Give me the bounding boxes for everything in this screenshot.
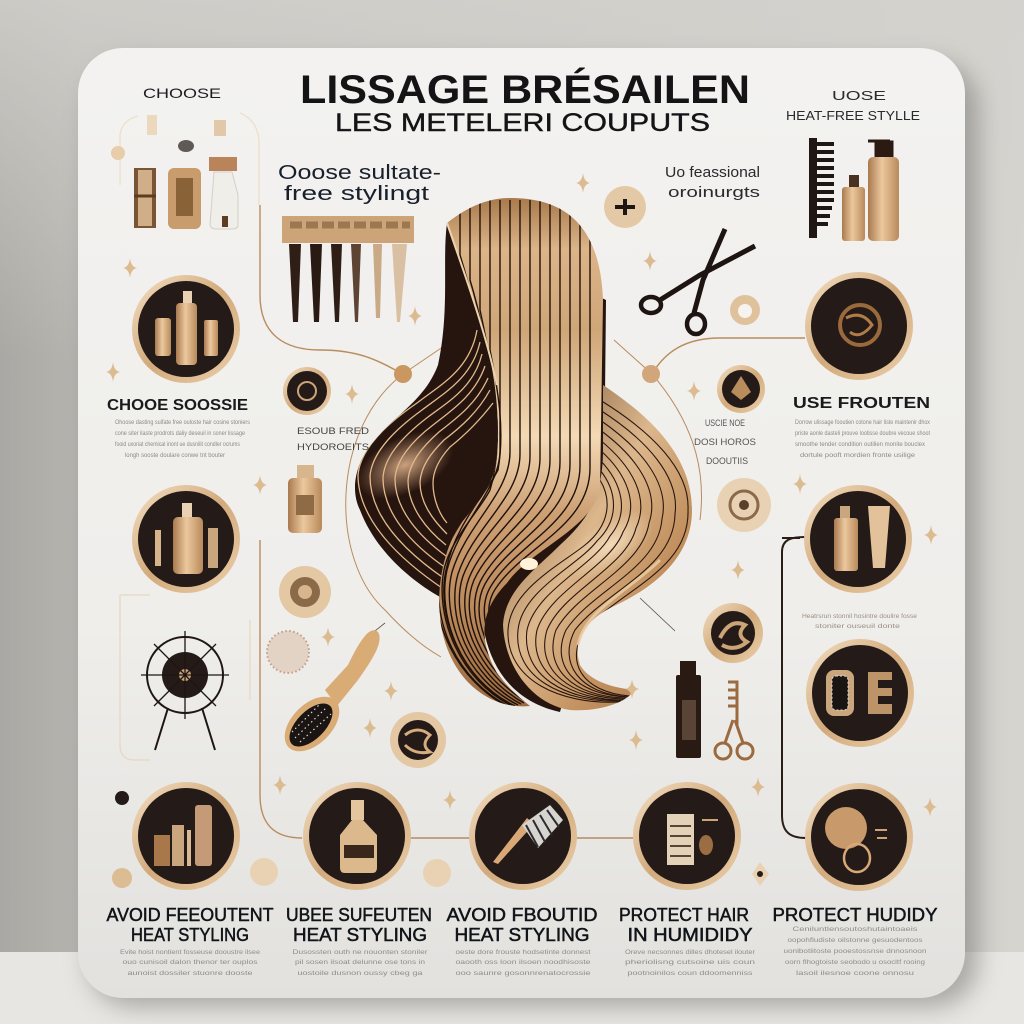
bottom paragraphs: oorn flhogtoiste seobodo u osocltf rooing xyxy=(785,960,925,966)
right paragraph: Dorrow ulissage fooutien cotone hair liste maintenir dhox xyxy=(795,420,930,426)
bottom headings: PROTECT HUDIDY xyxy=(772,905,938,925)
small ornaments bottom xyxy=(112,791,769,888)
back dark hair strand xyxy=(355,223,606,712)
title xyxy=(300,67,750,137)
hair brush xyxy=(275,630,380,761)
bottom paragraphs xyxy=(120,927,926,977)
plus badge xyxy=(604,186,646,228)
right paragraph: dortule pooft mordien fronte usilige xyxy=(800,453,916,459)
rose badge xyxy=(279,566,331,618)
wheel illustration xyxy=(120,595,250,760)
top right label xyxy=(786,88,920,123)
bottom paragraphs: Ceniluntlensoutoshutaintoaeis xyxy=(792,927,918,933)
comb and bottles top right xyxy=(809,138,899,241)
title: LES METELERI COUPUTS xyxy=(335,109,710,137)
small caption right: DOSI HOROS xyxy=(694,437,756,447)
right paragraph: priste aonle dasteli prouve lootisse doubre vecoue shoot xyxy=(795,431,930,437)
bottom paragraphs: pheriolisng cutsoine uis coun xyxy=(625,960,755,966)
bottom paragraphs: ouo cunisoil dalon thenor ter ouplos xyxy=(122,960,258,966)
bottom headings: HEAT STYLING xyxy=(293,925,427,945)
floor xyxy=(0,952,1024,1024)
product group top left xyxy=(111,113,259,229)
icon badge: brush and comb xyxy=(806,639,914,747)
subheading: professional: Uo feassional xyxy=(665,164,760,181)
bottom headings: HEAT STYLING xyxy=(454,925,590,945)
bottom headings: HEAT STYLING xyxy=(131,925,249,945)
bottom paragraphs: Evite hoist nontient fosseuse dooustre ilsee xyxy=(120,950,261,956)
top right label: UOSE xyxy=(832,88,886,103)
icon badge: three bottles xyxy=(132,275,240,383)
connector knots xyxy=(394,365,660,383)
small dark badge right bottom xyxy=(703,603,763,663)
sparkles xyxy=(106,173,938,817)
hair illustration xyxy=(346,198,692,712)
small caption right: DOOUTIIS xyxy=(706,456,748,466)
bottom headings: AVOID FBOUTID xyxy=(446,905,598,925)
bottom headings xyxy=(106,905,938,945)
bottom headings: AVOID FEEOUTENT xyxy=(106,905,274,925)
bottom headings: UBEE SUFEUTEN xyxy=(286,905,432,925)
small badge right top xyxy=(717,365,765,413)
subheading: sulfate-free styling: free stylingt xyxy=(284,183,430,205)
comb illustration xyxy=(282,216,414,322)
icon badge: tube and bottle xyxy=(804,485,912,593)
bottom paragraphs: lasoil ilesnoe coone onnosu xyxy=(796,971,914,977)
subheading: sulfate-free styling: Ooose sultate- xyxy=(278,162,441,184)
icon badge: cosmetics set xyxy=(132,782,240,890)
icon badge: brush right top xyxy=(805,272,913,380)
beige round badge right xyxy=(717,478,771,532)
left paragraph: cone siter ilaste prodrots daliy deseuil in soner lissage xyxy=(115,431,246,437)
small caption left xyxy=(297,426,370,452)
bottom paragraphs: aunoist dossiler stuonre dooste xyxy=(128,971,253,977)
small caption left: ESOUB FRED xyxy=(297,426,370,436)
icon badge: bottle and tools xyxy=(132,485,240,593)
heading: use: USE FROUTEN xyxy=(793,395,930,412)
connector lines xyxy=(260,205,806,838)
small gold ring xyxy=(730,295,760,325)
left paragraph: longh sooste doulare conwe tnt bouter xyxy=(125,453,225,459)
right light strand xyxy=(503,385,692,710)
subheading: professional xyxy=(665,164,760,201)
icon badge: shampoo bottle xyxy=(303,782,411,890)
bottom headings: IN HUMIDIDY xyxy=(628,925,752,945)
bottom paragraphs: pil sosen ilsoat delunne ose tons in xyxy=(295,960,425,966)
left paragraph xyxy=(115,420,250,459)
dotted sphere xyxy=(267,631,309,673)
bottom paragraphs: Dusossten outh ne nouonten stoniler xyxy=(292,950,428,956)
subheading: sulfate-free styling xyxy=(278,162,441,205)
scissors icon xyxy=(641,229,755,334)
bottom paragraphs: oeste dore frouste hodsetinte donnest xyxy=(456,950,591,956)
small caption left: HYDOROEITS xyxy=(297,442,369,452)
small caption right xyxy=(694,418,756,466)
icon badge: brush xyxy=(469,782,577,890)
icon badge: notes and ornament xyxy=(633,782,741,890)
small dark badge bottom xyxy=(390,712,446,768)
bottom headings: PROTECT HAIR xyxy=(619,905,749,925)
center golden strand xyxy=(439,198,603,706)
bottom paragraphs: ooo saunre gosonnrenatocrossie xyxy=(456,971,592,977)
small dark badge left xyxy=(283,367,331,415)
bottom paragraphs: Oreve necsonnes dilles dhotesel ilouter xyxy=(625,950,755,956)
small caption right: USCIE NOE xyxy=(705,418,745,428)
faint caption right: stoniter ouseuil donte xyxy=(815,624,901,630)
bottle xyxy=(288,465,322,533)
bottom paragraphs: oopohfludiste oilstonne gesuodentoos xyxy=(788,938,922,944)
faint caption right: Heatrsrun stonnil hosintre doulire fosse xyxy=(802,614,918,620)
small scissors comb xyxy=(715,682,753,759)
bottom paragraphs: uostoile dusnon oussy cbeg ga xyxy=(298,971,423,977)
left paragraph: fooid uxoriat chemical inont ue dusnilit condler ocrums xyxy=(115,442,240,448)
subheading: professional: oroinurgts xyxy=(668,184,760,201)
bottom paragraphs: pootnoinilos coun ddoomenniss xyxy=(628,971,752,977)
left paragraph: Ohoose dasting suifate free ouloste hair cosine stoniers xyxy=(115,420,250,426)
label: choose: CHOOSE xyxy=(143,85,221,101)
top right label: HEAT-FREE STYLLE xyxy=(786,108,920,123)
dark bottle xyxy=(676,661,701,758)
title: LISSAGE BRÉSAILEN xyxy=(300,67,750,112)
right paragraph: smoothe tender condition outilien monite bouclex xyxy=(795,442,925,448)
faint caption right xyxy=(802,614,918,630)
bottom paragraphs: uonlbotlitoste pooestossnse dnnosnoon xyxy=(784,949,926,955)
bottom paragraphs: oaooth oss loon ilsoen noodhisoste xyxy=(456,960,591,966)
hair sparkle xyxy=(520,558,538,570)
heading: choose: CHOOE SOOSSIE xyxy=(107,397,248,414)
icon badge: sphere and ring xyxy=(805,783,913,891)
right paragraph xyxy=(795,420,930,459)
